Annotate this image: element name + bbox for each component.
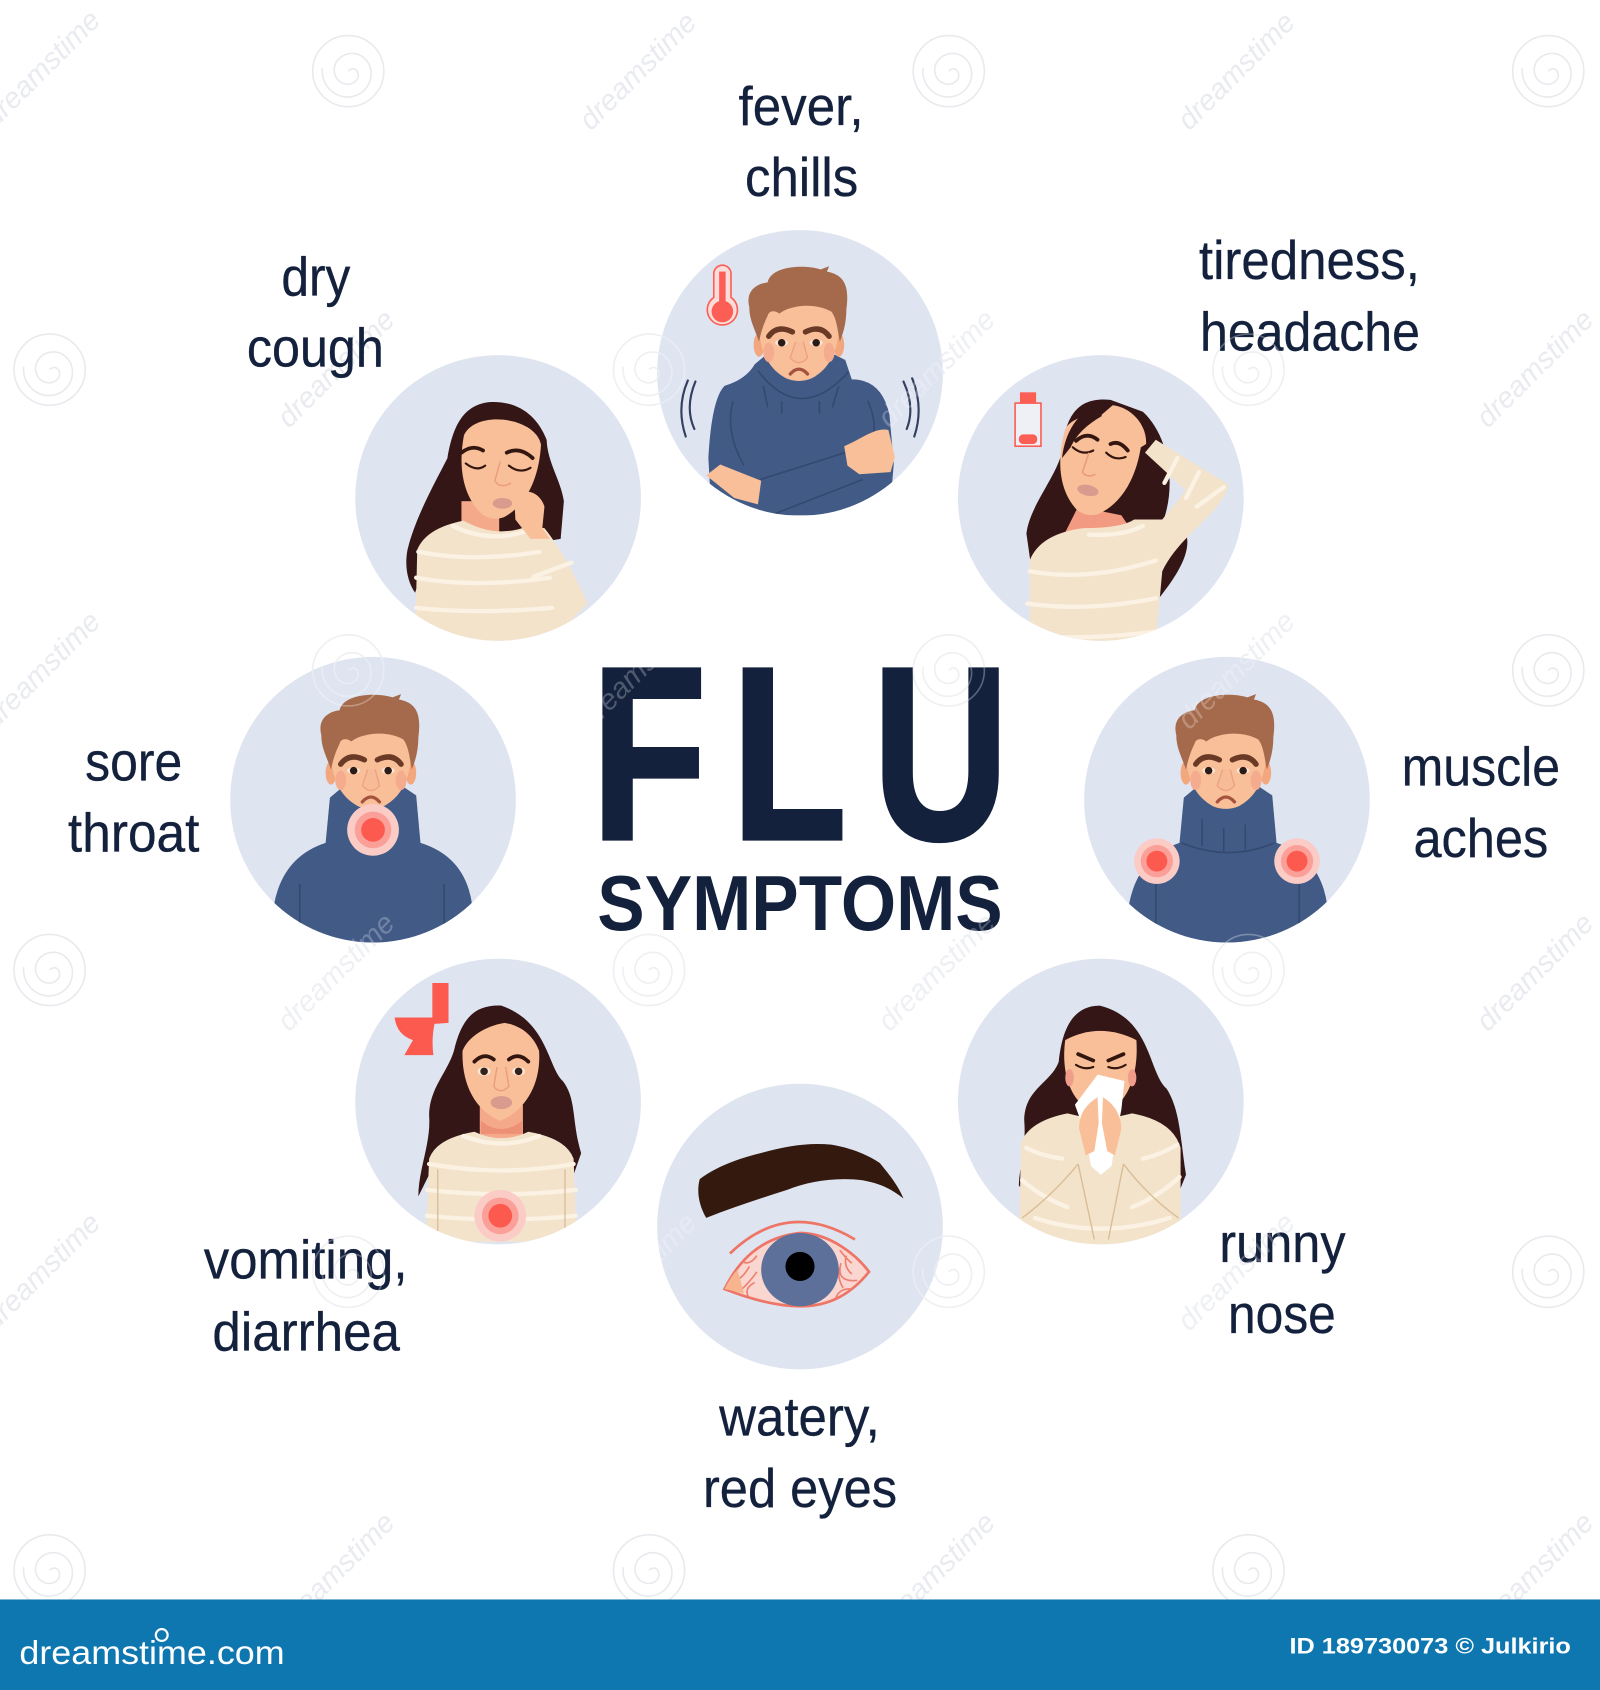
text: dreamstime (573, 6, 703, 136)
label: vomiting, diarrhea (204, 1228, 408, 1362)
icon: shiver lines (681, 378, 919, 437)
text: dreamstime (271, 907, 401, 1037)
label: sore throat: sore (85, 730, 182, 792)
text: dreamstime (1470, 1507, 1600, 1637)
circle background (355, 959, 641, 1244)
circle background (657, 1084, 943, 1369)
label: tiredness, headache: headache (1200, 300, 1420, 362)
panel: tiredness, headache (958, 229, 1420, 641)
label: watery, red eyes (703, 1386, 897, 1519)
circle background (958, 959, 1244, 1244)
panel: vomiting, diarrhea (204, 959, 641, 1362)
icon: low battery (1015, 392, 1041, 446)
label: vomiting, diarrhea: vomiting, (204, 1228, 408, 1290)
man shivering (706, 266, 895, 515)
label: runny nose: nose (1228, 1283, 1336, 1345)
text: dreamstime (872, 907, 1002, 1037)
panel: muscle aches (1084, 657, 1560, 943)
text: dreamstime (1172, 606, 1302, 736)
text: dreamstime (1172, 1207, 1302, 1337)
circle background (230, 657, 516, 943)
text: dreamstime (1470, 907, 1600, 1037)
subtitle: SYMPTOMS: SYMPTOMS (597, 861, 1003, 947)
woman coughing (406, 402, 588, 641)
label: tiredness, headache: tiredness, (1199, 229, 1420, 291)
text: dreamstime (872, 907, 1002, 1037)
woman blowing nose (1019, 1006, 1186, 1245)
pain marker: right shoulder (1274, 838, 1320, 884)
label: muscle aches: muscle (1402, 736, 1560, 798)
icon: thermometer (707, 265, 737, 325)
logo spiral (156, 1629, 168, 1641)
text: dreamstime (1172, 606, 1302, 736)
title: FLU: FLU (591, 617, 1009, 891)
text: dreamstime (872, 1507, 1002, 1637)
text: dreamstime (1172, 6, 1302, 136)
circle background (657, 230, 943, 516)
icon: toilet (395, 983, 449, 1055)
text: dreamstime (573, 606, 703, 736)
panel: dry cough (247, 245, 641, 641)
eyebrow (698, 1144, 904, 1218)
circle background (1084, 657, 1370, 943)
label: fever, chills (739, 75, 864, 208)
pain marker: left shoulder (1134, 838, 1180, 884)
label: tiredness, headache (1199, 229, 1420, 362)
red eye (725, 1222, 869, 1306)
label: runny nose (1219, 1212, 1346, 1345)
text: dreamstime (271, 304, 401, 434)
text: dreamstime (1470, 304, 1600, 434)
text: dreamstime (872, 304, 1002, 434)
label: dry cough (247, 245, 384, 378)
label: sore throat: throat (68, 801, 199, 863)
credit: ID 189730073 © Julkirio (1289, 1633, 1571, 1658)
woman (418, 1006, 581, 1242)
panel: sore throat (68, 657, 516, 943)
panel: watery, red eyes (657, 1084, 943, 1519)
label: fever, chills: fever, (739, 75, 864, 137)
label: watery, red eyes: watery, (718, 1386, 880, 1448)
panel: fever, chills (657, 75, 943, 516)
label: runny nose: runny (1219, 1212, 1346, 1274)
pain marker: stomach (474, 1190, 526, 1242)
label: dry cough: cough (247, 316, 384, 378)
label: dry cough: dry (281, 245, 351, 307)
label: muscle aches (1402, 736, 1560, 869)
footer band (0, 1599, 1600, 1690)
woman with headache (1026, 400, 1229, 641)
text: dreamstime (872, 304, 1002, 434)
man with turtleneck (1129, 694, 1327, 943)
circle background (355, 355, 641, 641)
circle background (958, 355, 1244, 641)
man with sore throat (274, 694, 472, 943)
pain marker: throat (347, 804, 399, 856)
label: vomiting, diarrhea: diarrhea (212, 1300, 400, 1362)
label: watery, red eyes: red eyes (703, 1457, 897, 1519)
label: sore throat (68, 730, 199, 863)
text: dreamstime (271, 907, 401, 1037)
label: muscle aches: aches (1413, 807, 1548, 869)
panel: runny nose (958, 959, 1346, 1345)
text: dreamstime (573, 1207, 703, 1337)
label: fever, chills: chills (745, 146, 858, 208)
text: dreamstime (271, 1507, 401, 1637)
logo: dreamstime.com: dreamstime.com (19, 1635, 285, 1672)
text: dreamstime (1172, 1207, 1302, 1337)
